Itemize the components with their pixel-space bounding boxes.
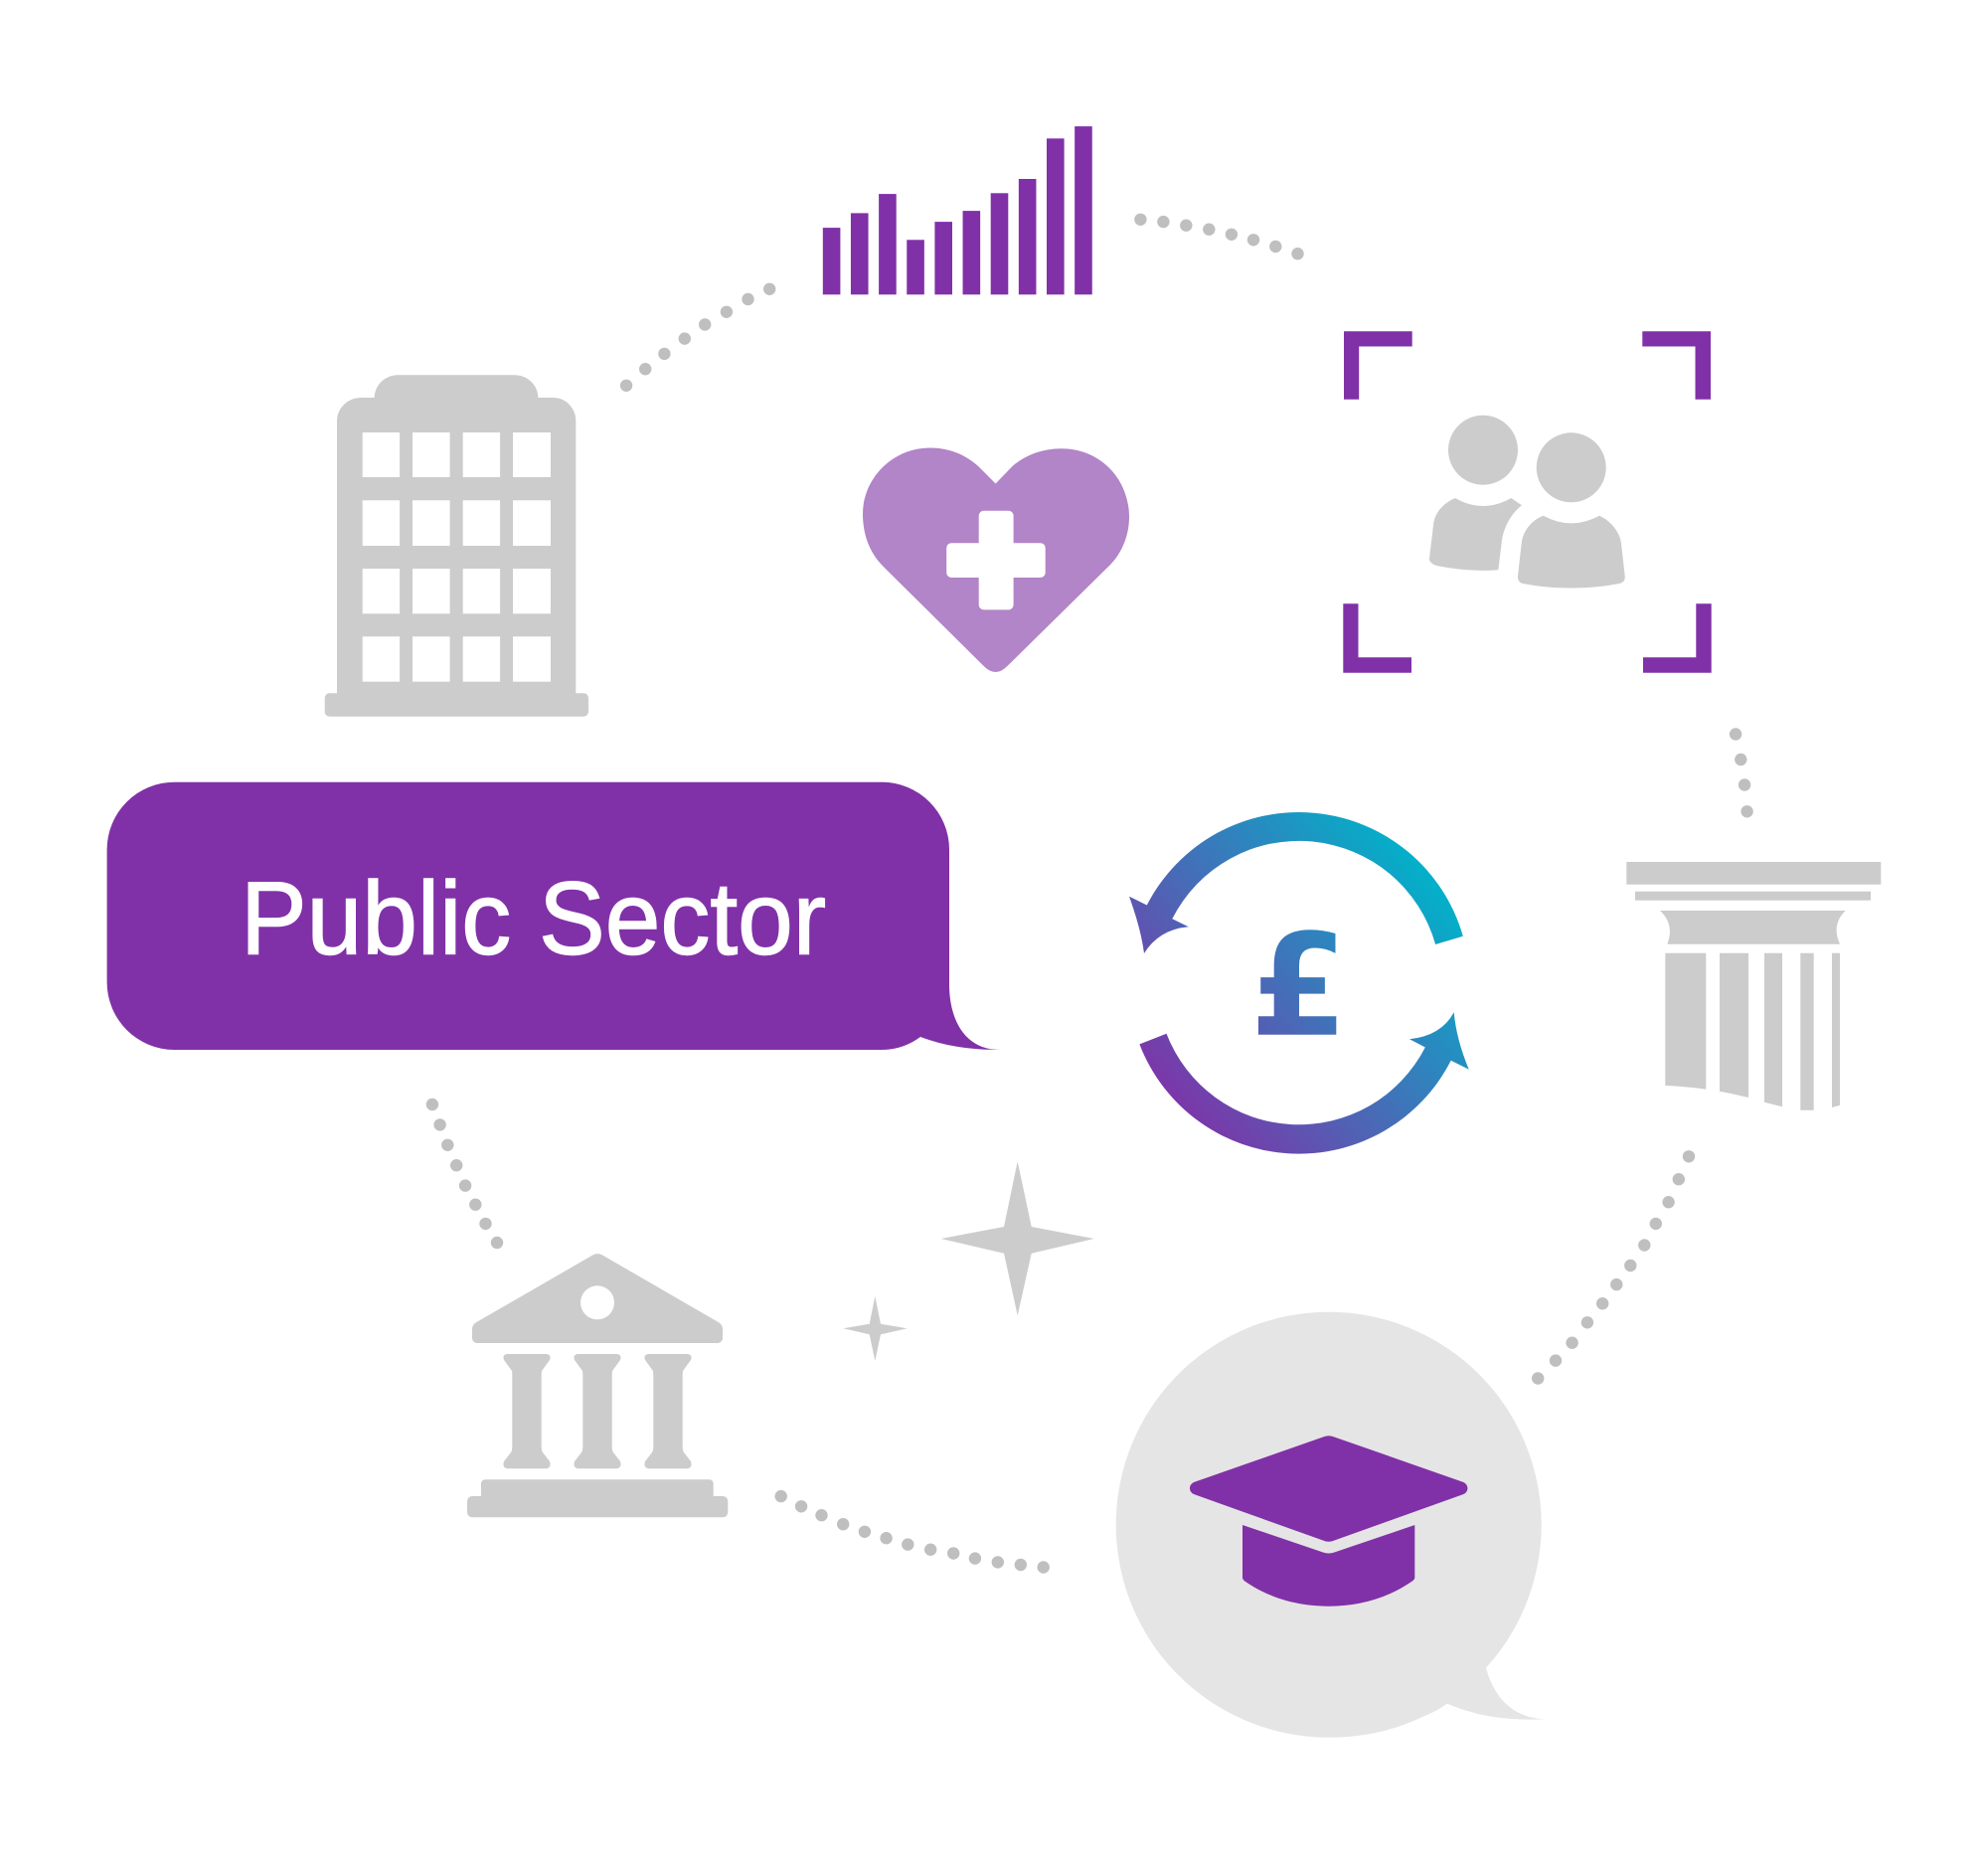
grey speech bubble: [1116, 1312, 1547, 1738]
dotted connector: bank to title bubble: [426, 1099, 503, 1249]
icon: graduation cap in speech bubble: [1116, 1312, 1547, 1738]
icon: heart with medical cross: [863, 447, 1129, 672]
icon: two people in viewfinder brackets: [1343, 331, 1712, 673]
icon: pound sign with circular arrows: [1129, 812, 1469, 1154]
dotted connector: building to bar chart: [620, 283, 775, 392]
viewfinder corner brackets: [1343, 331, 1712, 673]
people silhouettes: [1429, 416, 1625, 589]
title text: Public Sector: [241, 861, 826, 976]
icon: bank building: [467, 1254, 728, 1517]
pound symbol: £: [1249, 905, 1348, 1069]
dotted connector: bar chart to people: [1134, 214, 1304, 259]
bar chart icon: [823, 126, 1092, 294]
callout: Public Sector speech bubble: [107, 782, 1000, 1050]
dotted connector: graduation bubble to bank: [775, 1490, 1050, 1574]
top arrow: [1129, 812, 1463, 953]
graduation cap: [1190, 1436, 1467, 1607]
icon: sparkle stars: [843, 1161, 1094, 1361]
dotted connector: people to column: [1730, 728, 1753, 817]
icon: classical column: [1626, 862, 1881, 1110]
icon: office building: [325, 375, 588, 717]
bottom arrow: [1139, 1012, 1469, 1154]
dotted connector: column to graduation bubble: [1532, 1150, 1695, 1385]
